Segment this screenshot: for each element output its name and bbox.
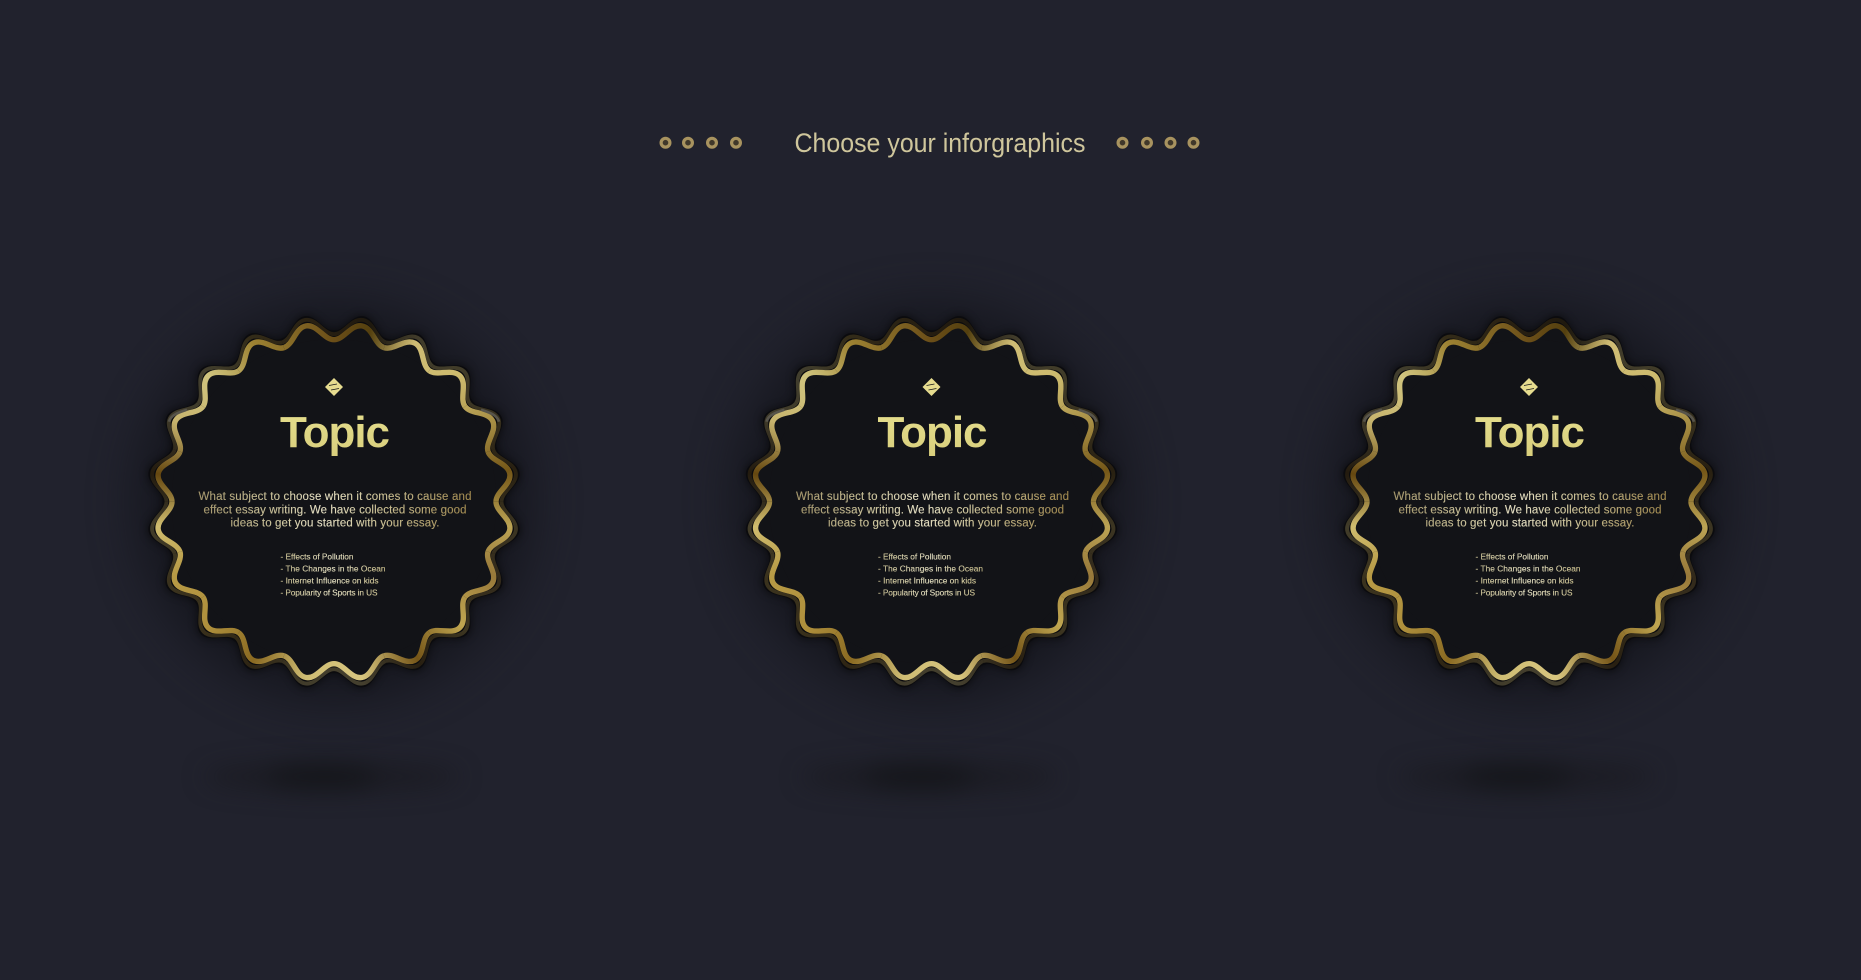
gold scalloped ring: [1345, 318, 1713, 686]
ground shadow: [802, 763, 1058, 791]
heading: Topic: Topic: [280, 408, 390, 457]
topic list: - Internet Influence on kids: [878, 576, 976, 586]
panel: topic badge 2: [732, 302, 1132, 791]
outer dark edge: [1335, 308, 1723, 695]
badge halo shadow: [1331, 304, 1727, 700]
icon: gold knot diamond: [1520, 378, 1538, 396]
topic list: - Effects of Pollution: [280, 552, 354, 562]
body paragraph: effect essay writing. We have collected some good: [801, 504, 1064, 516]
body paragraph: What subject to choose when it comes to cause and: [796, 491, 1069, 503]
body paragraph: ideas to get you started with your essay.: [1426, 517, 1634, 529]
outer dark edge: [738, 308, 1125, 695]
left dots: [661, 138, 740, 147]
title: Choose your inforgraphics: [794, 128, 1086, 158]
topic list: [1476, 552, 1581, 598]
topic list: [280, 552, 386, 598]
panel: topic badge 3: [1329, 302, 1729, 791]
inner dark panel: [1346, 319, 1712, 685]
inner dark panel: [151, 319, 517, 685]
ground shadow: [204, 763, 460, 791]
body paragraph: [796, 491, 1069, 529]
topic list: [878, 552, 983, 598]
badge halo shadow: [734, 304, 1130, 700]
icon: gold knot diamond: [922, 378, 940, 396]
body paragraph: effect essay writing. We have collected some good: [1398, 504, 1662, 516]
body paragraph: ideas to get you started with your essay.: [230, 517, 440, 529]
body paragraph: ideas to get you started with your essay.: [828, 517, 1037, 529]
header row: [661, 128, 1198, 158]
outer black scallop: [1336, 309, 1722, 695]
body paragraph: effect essay writing. We have collected some good: [204, 504, 466, 516]
grey highlights on outer band: [1364, 410, 1694, 422]
topic list: - The Changes in the Ocean: [280, 564, 386, 574]
gold scalloped ring: [748, 318, 1116, 686]
grey highlights on outer band: [766, 410, 1096, 422]
topic list: - The Changes in the Ocean: [1476, 564, 1581, 574]
topic list: - Popularity of Sports in US: [878, 588, 975, 598]
topic list: - Popularity of Sports in US: [280, 588, 378, 598]
topic list: - Internet Influence on kids: [280, 576, 378, 586]
topic list: - The Changes in the Ocean: [878, 564, 983, 574]
outer dark edge: [140, 308, 528, 695]
topic list: - Popularity of Sports in US: [1476, 588, 1573, 598]
outer black scallop: [739, 309, 1124, 695]
heading: Topic: Topic: [878, 408, 988, 457]
body paragraph: What subject to choose when it comes to cause and: [1394, 491, 1666, 503]
topic list: - Internet Influence on kids: [1476, 576, 1574, 586]
grey highlights on outer band: [169, 410, 499, 422]
heading: Topic: Topic: [1475, 408, 1585, 457]
inner dark panel: [749, 319, 1114, 685]
topic list: - Effects of Pollution: [878, 552, 951, 562]
right dots: [1118, 138, 1198, 147]
icon: gold knot diamond: [325, 378, 343, 396]
body paragraph: [1394, 491, 1666, 529]
ground shadow: [1399, 763, 1655, 791]
topic list: - Effects of Pollution: [1476, 552, 1549, 562]
body paragraph: What subject to choose when it comes to cause and: [198, 491, 472, 503]
body paragraph: [198, 491, 472, 529]
gold scalloped ring: [150, 318, 518, 686]
panel: topic badge 1: [134, 302, 534, 791]
outer black scallop: [141, 309, 527, 695]
badge halo shadow: [136, 304, 532, 700]
